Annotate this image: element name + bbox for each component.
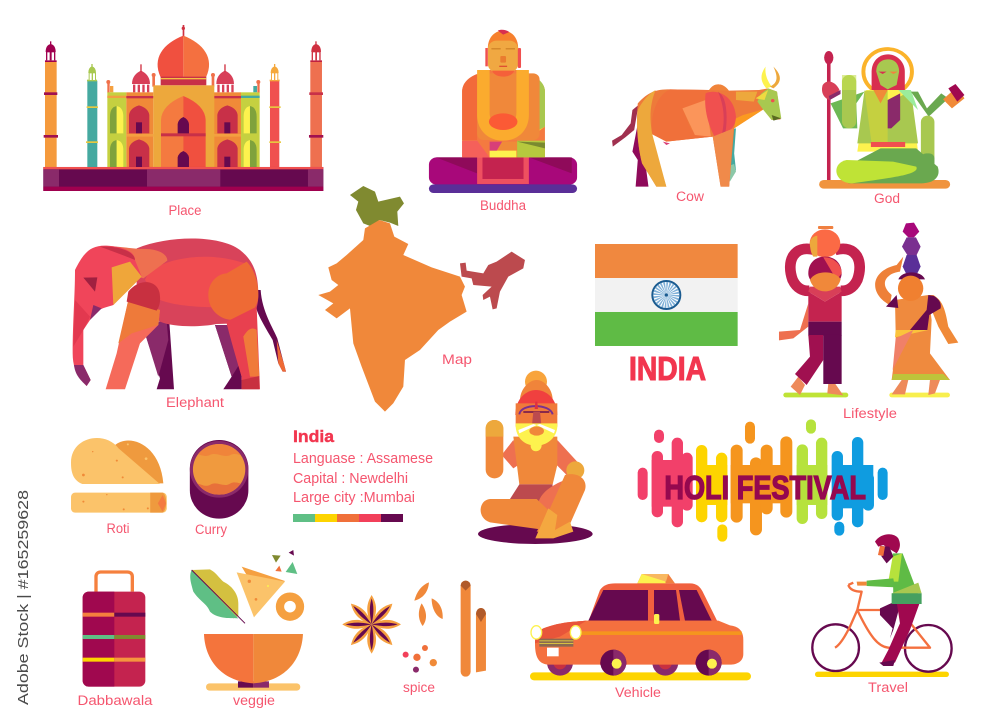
Kashmir region [350,186,404,227]
ring [280,597,300,617]
torso [462,70,545,157]
label: Cow: Cow [676,189,704,204]
front wheels [600,650,722,676]
green stripe [595,312,738,346]
label: Elephant: Elephant [166,395,224,410]
icon: seated sadhu [478,371,593,544]
northeast region [460,252,525,309]
staff [824,51,833,185]
icon: spices [342,581,486,677]
blue band [832,443,883,531]
spice dots [403,645,437,673]
icon: dabbawala tiffin [83,572,145,687]
bowl [204,634,303,691]
arms [486,420,584,479]
map of India [318,186,525,412]
small confetti [272,550,297,574]
icon: God [819,49,964,189]
label: Curry: Curry [195,522,227,537]
mainland [318,220,467,412]
head and horns [756,67,781,121]
label: Dabbawala: Dabbawala [78,693,153,708]
head and trunk [73,246,142,386]
label: veggie: veggie [233,693,275,708]
wings [107,92,260,167]
saffron stripe [595,244,738,278]
chakra [652,281,680,309]
man [779,226,860,397]
head [485,30,521,77]
samosa [237,567,285,617]
Indian flag [595,244,738,346]
label: Place: Place [168,203,202,218]
far legs and tail [612,105,736,187]
stock id side text: Adobe Stock | #165259628 [15,490,32,705]
halo [863,49,912,94]
label: Buddha: Buddha [480,198,526,213]
large city line: Large city :Mumbai [293,490,415,506]
label: Vehicle: Vehicle [615,685,661,700]
icon: curry pot [190,440,249,519]
rear leg [227,307,260,389]
far legs [146,322,242,389]
legs [481,474,586,538]
label: Roti: Roti [106,521,130,536]
leaf [190,569,245,623]
label: Map: Map [442,352,472,367]
icon: roti [71,438,167,513]
orange band [731,427,792,529]
cushion [429,157,577,193]
info heading: India [293,428,335,446]
hair and face [872,54,905,92]
road [530,672,751,680]
bike frame [835,583,930,648]
body [137,239,258,326]
taxi sign [637,574,675,583]
heading: INDIA: INDIA [629,350,706,387]
body [857,90,918,152]
near leg [882,602,919,663]
icon: taxi [530,574,751,680]
seeds [414,582,443,626]
white stripe [595,278,738,312]
lime band [797,424,827,518]
star anise [342,595,401,654]
icon: Buddha [429,30,577,193]
label: God: God [874,191,900,206]
turban [515,371,557,415]
icon: cyclist [812,534,952,677]
capital line: Capital : Newdelhi [293,471,408,487]
minarets [44,41,323,167]
holi festival graphic [643,424,883,537]
label: Lifestyle: Lifestyle [843,406,897,421]
woman [875,223,958,397]
label: Travel: Travel [868,680,908,695]
head [875,534,900,563]
ground [815,672,949,677]
label: spice: spice [403,680,435,695]
torso [513,437,557,484]
colour bar [293,514,403,522]
far leg [880,600,898,638]
torso [857,553,922,604]
body [637,84,781,187]
small domes [106,64,260,93]
icon: lifestyle couple [779,223,958,397]
wheels [812,624,952,672]
legs and base [819,148,950,189]
icon: Taj Mahal [43,25,323,191]
icon: veggie bowl [190,550,303,691]
icon: Cow [612,67,781,187]
language line: Languase : Assamese [293,451,433,467]
tail [256,290,286,372]
car body [531,583,743,665]
arms [822,75,964,170]
pink band [643,435,692,522]
rear wheels [547,650,678,676]
icon: Elephant [73,239,286,389]
info block: India facts [293,428,433,522]
plinth [43,167,323,191]
main dome [158,25,209,85]
yellow band [696,451,727,537]
shadow [478,524,593,544]
face and beard [516,402,557,451]
holi title: HOLI FESTIVAL [664,470,866,507]
central iwan [153,85,214,167]
cinnamon sticks [461,581,486,677]
front leg and shoulder [106,246,167,389]
